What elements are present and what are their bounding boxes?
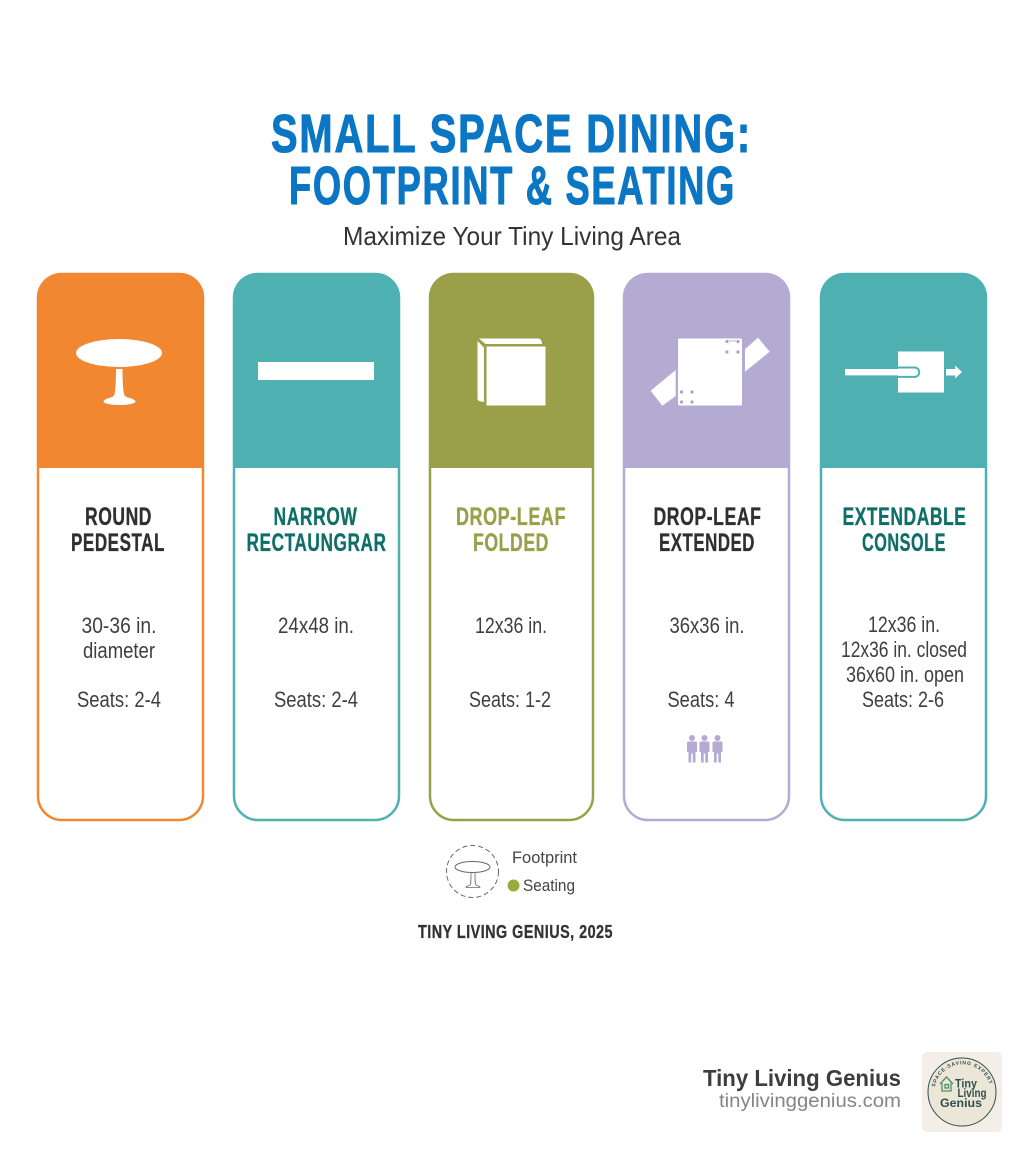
panel: narrow rectangular xyxy=(233,273,400,820)
logo tagline: SPACE-SAVING EXPERT xyxy=(932,1060,992,1087)
title xyxy=(271,104,752,216)
panel: drop-leaf extended xyxy=(623,273,790,820)
icon: narrow table xyxy=(258,362,374,380)
logo wordmark: Tiny xyxy=(955,1076,977,1090)
details: extendable console: Seats: 2-6 xyxy=(862,687,944,712)
subtitle: Maximize Your Tiny Living Area xyxy=(343,221,681,251)
heading: drop-leaf folded: FOLDED xyxy=(473,529,549,557)
panel: drop-leaf folded xyxy=(429,273,594,820)
heading: drop-leaf extended: EXTENDED xyxy=(659,529,755,557)
details: narrow rectangular: Seats: 2-4 xyxy=(274,687,358,712)
legend marker: seating xyxy=(508,880,520,892)
details: round pedestal: 30-36 in. xyxy=(82,613,156,638)
heading: drop-leaf folded xyxy=(456,503,566,557)
icon: folded table xyxy=(478,338,546,406)
heading: drop-leaf extended xyxy=(654,503,762,557)
heading: extendable console: EXTENDABLE xyxy=(842,503,966,531)
icon: extended drop-leaf table xyxy=(651,338,770,406)
details: drop-leaf extended: 36x36 in. xyxy=(670,613,744,638)
legend label: seating: Seating xyxy=(523,876,575,895)
details: narrow rectangular: 24x48 in. xyxy=(278,613,354,638)
panel: round pedestal xyxy=(37,273,204,820)
heading: narrow rectangular: RECTAUNGRAR xyxy=(246,529,386,557)
panel: extendable console xyxy=(820,273,987,820)
brand name: Tiny Living Genius xyxy=(703,1065,901,1091)
heading: narrow rectangular xyxy=(246,503,386,557)
logo wordmark: Living xyxy=(958,1086,986,1100)
details: extendable console: 12x36 in. xyxy=(868,612,940,637)
icon: footprint table xyxy=(446,846,498,898)
heading: extendable console: CONSOLE xyxy=(862,529,946,557)
heading: round pedestal: PEDESTAL xyxy=(71,529,165,557)
icon: house xyxy=(940,1077,953,1091)
details: round pedestal: diameter xyxy=(83,638,155,663)
heading: narrow rectangular: NARROW xyxy=(274,503,358,531)
heading: drop-leaf extended: DROP-LEAF xyxy=(654,503,762,531)
logo badge xyxy=(922,1052,1002,1132)
details: drop-leaf folded xyxy=(469,613,551,712)
heading: round pedestal: ROUND xyxy=(85,503,152,531)
legend label: footprint: Footprint xyxy=(512,848,577,867)
logo wordmark: Genius xyxy=(940,1096,982,1110)
details: round pedestal: Seats: 2-4 xyxy=(77,687,161,712)
details: drop-leaf folded: Seats: 1-2 xyxy=(469,687,551,712)
title: SMALL SPACE DINING: xyxy=(271,104,752,164)
details: extendable console: 12x36 in. closed xyxy=(841,637,967,662)
title: FOOTPRINT & SEATING xyxy=(289,156,736,216)
details: drop-leaf extended: Seats: 4 xyxy=(668,687,734,712)
logo wordmark xyxy=(940,1076,986,1110)
details: narrow rectangular xyxy=(274,613,358,712)
heading: round pedestal xyxy=(71,503,165,557)
heading: extendable console xyxy=(842,503,966,557)
details: drop-leaf extended xyxy=(668,613,744,712)
heading: drop-leaf folded: DROP-LEAF xyxy=(456,503,566,531)
details: round pedestal xyxy=(77,613,161,712)
legend xyxy=(446,846,577,898)
icon: three people xyxy=(687,735,722,762)
details: drop-leaf folded: 12x36 in. xyxy=(475,613,547,638)
source credit: TINY LIVING GENIUS, 2025 xyxy=(418,922,613,942)
brand url: tinylivinggenius.com xyxy=(719,1091,901,1112)
icon: extendable console xyxy=(845,352,962,392)
details: extendable console: 36x60 in. open xyxy=(846,662,964,687)
icon: round pedestal table xyxy=(76,339,162,405)
details: extendable console xyxy=(841,612,967,712)
